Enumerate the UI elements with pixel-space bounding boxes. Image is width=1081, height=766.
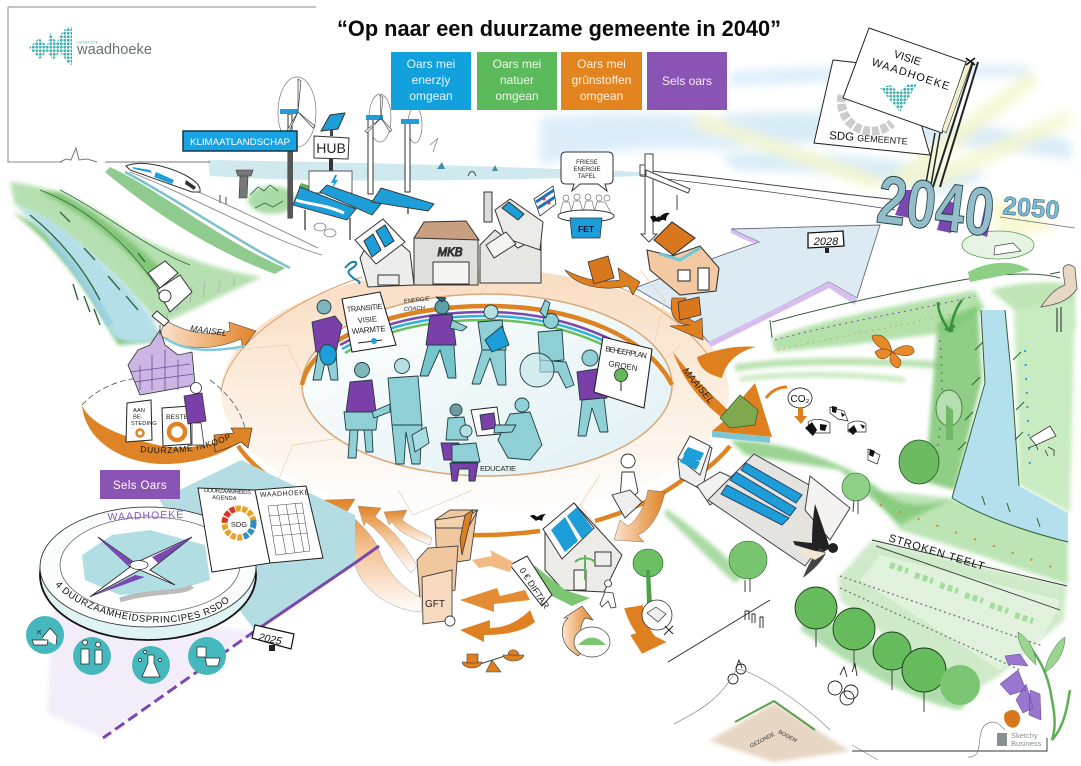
book: duurzaamheids agenda bbox=[198, 486, 323, 572]
label: educatie: EDUCATIE bbox=[480, 464, 516, 473]
table: FET: FET bbox=[578, 224, 595, 234]
outer circular disc bbox=[221, 268, 729, 530]
logo: gemeente waadhoeke: waadhoeke bbox=[76, 42, 152, 58]
icon: bat bbox=[650, 213, 670, 223]
legend box: energy bbox=[391, 52, 471, 110]
person gardening bbox=[600, 580, 616, 608]
legend box: nature: omgean bbox=[495, 89, 539, 103]
cows bbox=[805, 406, 880, 464]
tag: 0 euro diftar bbox=[510, 556, 552, 611]
row of trees bbox=[795, 587, 980, 712]
band: road to 2025 bbox=[47, 460, 379, 738]
compass: principles bbox=[39, 506, 257, 641]
building: MKB bbox=[414, 221, 479, 285]
shopper with basket bbox=[612, 454, 642, 518]
bank lines and reeds bbox=[770, 274, 1068, 570]
mower on dike bbox=[148, 261, 192, 326]
legend box: energy: enerzjy bbox=[412, 73, 450, 87]
person: wheelchair user bbox=[520, 300, 574, 388]
book: duurzaamheids agenda: WAADHOEKE bbox=[260, 489, 310, 499]
credit: sketchy business: Sketchy bbox=[1011, 731, 1038, 740]
document: aanbesteding: STEDING bbox=[131, 421, 157, 427]
sign: beheerplan groen: BEHEERPLAN bbox=[605, 344, 648, 360]
hedge and tree near barn bbox=[665, 473, 870, 592]
dark bush bbox=[899, 440, 939, 484]
group: children and educator bbox=[441, 398, 542, 481]
person: woman handshake bbox=[344, 362, 378, 458]
soil cross section: gezonde bodem: BODEM bbox=[777, 729, 798, 744]
arrow down from house with materials bbox=[670, 297, 703, 340]
CO2 bubble with arrow: CO₂ bbox=[791, 394, 810, 405]
farm on hill top right bbox=[962, 231, 1034, 282]
frame around logo bbox=[8, 7, 316, 162]
bat small bbox=[530, 514, 546, 521]
butterfly bbox=[872, 335, 914, 368]
house under construction bbox=[647, 222, 719, 295]
document: aanbesteding: BE- bbox=[133, 414, 143, 420]
farm meadow with hedge bbox=[730, 282, 1076, 585]
document: bestek bbox=[162, 406, 193, 446]
orange waste arrows bbox=[324, 499, 535, 642]
station tower and bush bbox=[236, 170, 315, 214]
wind turbine 2 bbox=[365, 94, 392, 194]
year marker: 2040 with visie signs: VISIE bbox=[892, 48, 923, 69]
compass: principles: 4 DUURZAAMHEIDSPRINCIPES RSDO bbox=[56, 582, 228, 623]
waste bins: GFT bbox=[417, 510, 478, 626]
document: aanbesteding bbox=[126, 400, 157, 442]
logo: gemeente waadhoeke bbox=[29, 27, 152, 65]
sky washes bbox=[540, 64, 1072, 240]
year marker: 2040 with visie signs: 2040 bbox=[873, 161, 999, 251]
buildings: left solar house bbox=[345, 219, 414, 287]
year marker: 2040 with visie signs: SDG GEMEENTE bbox=[829, 130, 908, 147]
legend box: raw materials: Oars mei bbox=[577, 57, 626, 71]
legend box: energy: Oars mei bbox=[407, 57, 455, 71]
sign: beheerplan groen bbox=[594, 337, 652, 408]
sign: 2025: 2025 bbox=[256, 631, 283, 648]
circular principle icons bbox=[26, 616, 226, 684]
speech bubble: friese energie tafel: FRIESE bbox=[576, 160, 598, 166]
speech bubble: friese energie tafel bbox=[561, 152, 613, 191]
person: man with briefcase bbox=[372, 358, 429, 464]
label: energie coach: ENERGIE bbox=[404, 296, 430, 305]
duurzame inkoop bowl bbox=[82, 378, 252, 464]
person: energy coach bbox=[420, 297, 467, 378]
book: duurzaamheids agenda: DUURZAAMHEIDS bbox=[204, 488, 251, 496]
godwit bird bbox=[1041, 265, 1077, 332]
willow trees bbox=[936, 300, 962, 440]
waste bins: GFT: GFT bbox=[425, 599, 445, 610]
year marker: 2050: 2050 bbox=[1002, 191, 1061, 225]
purple label: sels oars left bbox=[100, 470, 180, 499]
person: woman with tablet bbox=[472, 305, 509, 385]
speech bubble: friese energie tafel: ENERGIE bbox=[573, 167, 601, 173]
sign: transitie visie warmte: VISIE bbox=[357, 314, 377, 325]
train bbox=[126, 163, 200, 192]
legend box: raw materials bbox=[561, 52, 642, 110]
person behind bestek bbox=[184, 382, 206, 445]
sign: klimaatlandschap bbox=[183, 131, 297, 218]
tent and picnic bbox=[1028, 426, 1056, 456]
orange flow ring bbox=[238, 446, 730, 535]
legend box: raw materials: omgean bbox=[580, 89, 623, 103]
legend box: self bbox=[647, 52, 727, 110]
arrow: maaisel right with compost: MAAISEL bbox=[680, 366, 716, 406]
building: factory bbox=[480, 192, 543, 283]
credit: sketchy business bbox=[852, 722, 1047, 757]
arrow: maaisel left bbox=[160, 320, 256, 350]
purple label: sels oars left: Sels Oars bbox=[113, 480, 167, 492]
credit: sketchy business: Business bbox=[1011, 739, 1042, 748]
building: MKB: MKB bbox=[438, 247, 463, 259]
label: energie coach bbox=[404, 296, 430, 313]
scales bbox=[462, 650, 524, 672]
logo: gemeente waadhoeke: GEMEENTE bbox=[77, 40, 99, 44]
sign: transitie visie warmte: WARMTE bbox=[351, 324, 386, 336]
big future arrow bbox=[635, 225, 880, 348]
wind turbine 1 bbox=[278, 77, 316, 218]
sign: beheerplan groen: GROEN bbox=[608, 359, 638, 373]
title: “Op naar een duurzame gemeente in 2040” bbox=[337, 16, 781, 41]
flag of Friesland bbox=[534, 186, 556, 216]
inner circle with rainbow bbox=[302, 294, 672, 476]
strip cultivation field bbox=[838, 532, 1067, 700]
legend box: nature: Oars mei bbox=[493, 57, 541, 71]
sign: klimaatlandschap: KLIMAATLANDSCHAP bbox=[190, 137, 290, 148]
solar field bbox=[293, 185, 434, 240]
circular soil arrows bbox=[562, 600, 673, 657]
document: aanbesteding: AAN bbox=[133, 408, 145, 414]
sign: transitie visie warmte: TRANSITIE bbox=[346, 302, 383, 314]
tree beside house bbox=[633, 549, 663, 605]
label: energie coach: COACH bbox=[404, 305, 426, 313]
farm with solar barn bbox=[678, 436, 850, 566]
sign: 2028 bbox=[808, 231, 844, 253]
legend box: nature bbox=[477, 52, 557, 110]
soil cross section: gezonde bodem bbox=[674, 670, 878, 762]
arrow: maaisel right with compost bbox=[673, 347, 772, 443]
sign: 2028: 2028 bbox=[813, 236, 839, 248]
legend box: raw materials: grûnstoffen bbox=[572, 73, 631, 87]
hub with solar panel and charger: HUB bbox=[316, 140, 346, 156]
wind turbine 3 bbox=[401, 107, 422, 192]
table: FET bbox=[558, 194, 614, 238]
town hall bbox=[128, 325, 195, 395]
year marker: 2040 with visie signs bbox=[814, 28, 999, 251]
strip cultivation field: STROKEN TEELT bbox=[887, 532, 986, 573]
compass: principles: WAADHOEKE bbox=[107, 509, 185, 523]
soil cross section: gezonde bodem: GEZONDE bbox=[749, 732, 776, 750]
CO2 bubble with arrow bbox=[766, 387, 812, 424]
book: duurzaamheids agenda: SDG bbox=[231, 520, 247, 529]
legend box: nature: natuer bbox=[500, 73, 534, 87]
left dike and ditch landscape bbox=[10, 167, 322, 345]
person: woman in hijab bbox=[577, 350, 608, 436]
book: duurzaamheids agenda: AGENDA bbox=[212, 495, 237, 502]
sea horizon bbox=[60, 138, 1075, 228]
sign: transitie visie warmte bbox=[342, 292, 396, 352]
construction crane bbox=[640, 154, 690, 242]
canal bbox=[952, 310, 1068, 542]
sign: 2025 bbox=[252, 625, 294, 651]
document: bestek: BESTEK bbox=[166, 414, 193, 421]
person: man with bag bbox=[312, 300, 342, 380]
duurzame inkoop bowl: DUURZAME INKOOP bbox=[140, 434, 230, 454]
pedestrians and cyclists bbox=[668, 600, 858, 705]
orange arrow to house below shopper bbox=[614, 490, 665, 542]
arrow from disc to house with materials bbox=[565, 256, 640, 295]
tag: 0 euro diftar: 0 € DIFTAR bbox=[517, 566, 551, 611]
speech bubble: friese energie tafel: TAFEL bbox=[578, 174, 597, 180]
arrow: maaisel left: MAAISEL bbox=[190, 323, 228, 338]
bluebell and bumblebee bbox=[1000, 632, 1070, 740]
legend box: energy: omgean bbox=[409, 89, 453, 103]
swallow bbox=[793, 504, 838, 578]
eco house with solar roof bbox=[534, 503, 622, 606]
year marker: 2040 with visie signs: WAADHOEKE bbox=[870, 56, 951, 93]
hub with solar panel and charger bbox=[309, 113, 352, 193]
legend box: self: Sels oars bbox=[662, 74, 712, 88]
